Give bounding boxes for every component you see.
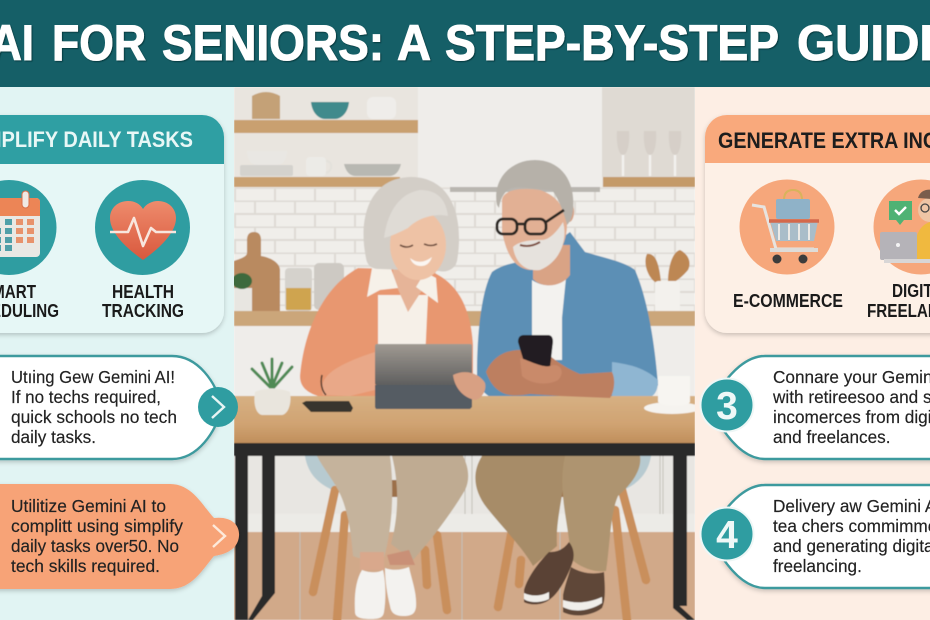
icon: calendar (0, 180, 56, 275)
title: A (397, 15, 431, 71)
icon: chevron (213, 525, 225, 547)
number badge 4: 4 (716, 514, 738, 557)
number badge 4 (700, 508, 754, 560)
man: legs (475, 456, 640, 615)
callout text: daily tasks. (11, 427, 96, 447)
phone on table (302, 401, 353, 412)
label: e-commerce: E-COMMERCE (733, 291, 843, 311)
woman: torso (300, 177, 473, 397)
title: SENIORS: (162, 15, 384, 71)
title: STEP-BY-STEP (445, 15, 779, 71)
callout text: freelancing. (773, 556, 862, 576)
card: generate extra income (705, 115, 930, 333)
callout: step 1 (0, 356, 238, 459)
hands and phone (453, 335, 614, 400)
title (0, 15, 930, 71)
callout text: Utilitize Gemini AI to (11, 496, 166, 516)
potted plant (252, 359, 292, 415)
chairs (305, 456, 651, 620)
callout: step 4 (700, 485, 930, 588)
icon: digital freelancer (874, 180, 930, 274)
callout text: Utıing Gew Gemini AI! (11, 367, 175, 387)
callout text (772, 367, 930, 447)
callout: step 3 (700, 356, 930, 459)
icon: heart with pulse (95, 180, 190, 275)
title: FOR (52, 15, 146, 71)
callout text: tech skills required. (11, 556, 160, 576)
label: health tracking: TRACKING (102, 301, 184, 321)
tablet (375, 344, 472, 409)
table frame (234, 443, 695, 620)
card: simplify daily tasks (0, 115, 224, 333)
panel: left background (0, 87, 234, 620)
label: health tracking (102, 282, 184, 321)
icon: shopping cart (740, 180, 834, 274)
callout: step 2 (0, 484, 239, 589)
coffee cup and saucer (643, 395, 695, 415)
label: health tracking: HEALTH (112, 282, 174, 302)
callout text: daily tasks over50. No (11, 536, 179, 556)
man: torso (477, 160, 658, 398)
icon: teal chevron button (198, 387, 238, 427)
number badge 3 (700, 378, 754, 432)
number badge 3: 3 (716, 385, 738, 428)
label: digital freelancing (867, 281, 930, 321)
photo: seniors at kitchen table (232, 87, 700, 620)
label: smart scheduling (0, 282, 59, 321)
callout text: complitt using simplify (11, 516, 183, 536)
callout text: If no techs required, (11, 387, 161, 407)
callout text (11, 367, 177, 447)
panel: right background (695, 87, 930, 620)
table top (234, 396, 695, 443)
woman: legs (317, 456, 468, 619)
callout text (11, 496, 183, 576)
callout text: and freelances. (773, 427, 891, 447)
callout text: quick schools no tech (11, 407, 177, 427)
callout text (773, 496, 930, 576)
header band (0, 0, 930, 87)
